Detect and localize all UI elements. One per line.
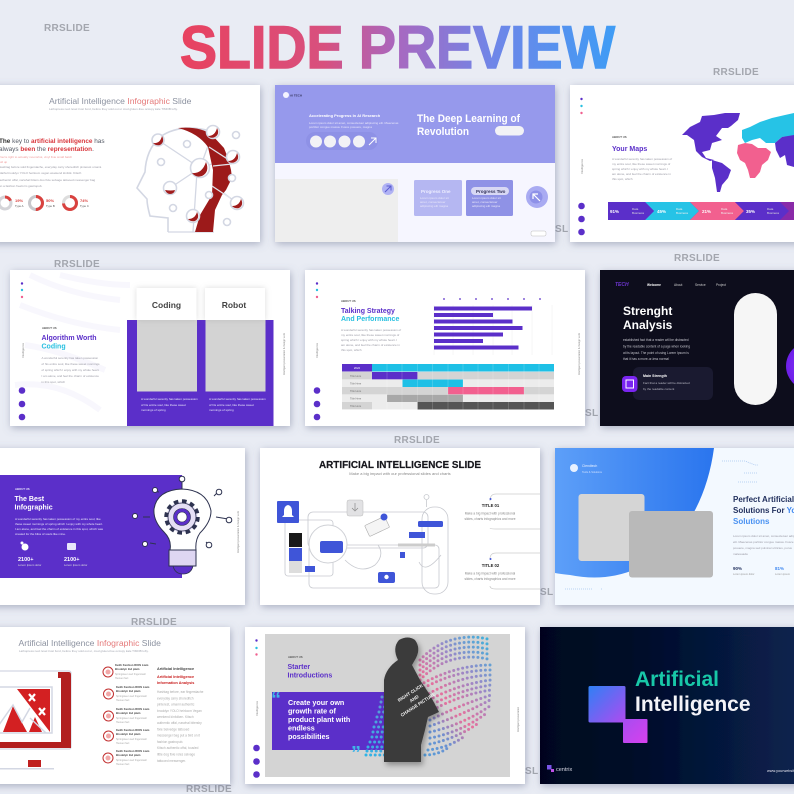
- chevron data strip: Data: [767, 207, 774, 211]
- text block: right column: messenger bag put a bird on it: [157, 734, 200, 738]
- text block: starter: Starter: [288, 664, 310, 671]
- slide: Strength Analysis dark: [600, 270, 794, 426]
- chevron data strip: Data: [632, 207, 639, 211]
- icon: AI head: [137, 126, 244, 232]
- text block: right column: [157, 667, 204, 763]
- card: progress one: amet, consectetuer: [420, 200, 446, 204]
- chevron data strip: Business: [767, 211, 780, 215]
- captions: of his entire soul, like these sweet: [141, 403, 186, 407]
- gray image placeholder: [275, 179, 398, 242]
- text block: key statement: always been the representation.: [0, 146, 94, 153]
- image placeholder left: [137, 320, 197, 392]
- list: numbered items: Keith Fashion ROIS Liam: [116, 707, 150, 711]
- text block: malesuada: [733, 552, 748, 556]
- text block: right column: fixie Selvedge tattooed: [157, 728, 189, 732]
- text block: right column: fashion gastropub.: [157, 740, 183, 744]
- chevron data strip: 35%: [746, 209, 755, 214]
- heading: ARTIFICIAL INTELLIGENCE SLIDE: [319, 460, 481, 471]
- callout: title 02: slides, charts infographics and more: [464, 577, 516, 581]
- gantt table: Title Here: [350, 382, 362, 386]
- dots: [21, 282, 23, 298]
- picture prompt: [392, 680, 436, 718]
- card: Coding: Coding: [152, 300, 181, 310]
- list: numbered items: Heaven fact: [116, 721, 130, 724]
- social icons: [578, 203, 585, 235]
- dots: [316, 282, 318, 298]
- text block: right column: Information Analysis: [157, 681, 194, 685]
- card: main strength: Main Strength: [643, 374, 667, 378]
- quote: endless: [288, 724, 315, 732]
- purple panel: [0, 475, 182, 578]
- person silhouette: [384, 638, 439, 762]
- text block: progress: Accelerating Progress In AI Research: [309, 113, 381, 118]
- page control: [531, 231, 546, 236]
- text block: algorithm: Coding: [42, 344, 66, 350]
- avatars row: [306, 132, 378, 150]
- text block: algorithm: ABOUT US: [42, 326, 57, 330]
- card: Robot: Robot: [222, 300, 246, 310]
- text block: description: that it has a more-or-less normal: [623, 357, 669, 361]
- text block: strategy: am alone, and feel the charm of existence in: [341, 343, 400, 347]
- watermarks: RRSLIDE: [713, 67, 759, 78]
- text block: right column: authentic offal, narwhal bitersby: [157, 721, 202, 725]
- card: Robot: [205, 288, 265, 320]
- callout: title 01: slides, charts infographics and more: [464, 517, 516, 521]
- heading: Intelligence: [635, 693, 751, 716]
- text block: maps: Your Maps: [612, 146, 647, 153]
- nav: About: [674, 283, 682, 287]
- donut charts: 50%: [46, 198, 54, 203]
- gantt table: Title Here: [350, 404, 362, 408]
- text block: strategy: Talking Strategy: [341, 308, 395, 315]
- text block: algorithm: of spring which I enjoy with my whole heart.: [42, 368, 100, 372]
- slide: Perfect Artificial solutions: [555, 448, 794, 605]
- side label: Intelligence: [580, 158, 584, 174]
- image pill: [734, 293, 777, 405]
- nav: Service: [695, 283, 706, 287]
- donut charts: Type A: [15, 204, 24, 208]
- watermarks: SL: [585, 408, 598, 419]
- side label: Intelligence: [21, 342, 25, 358]
- text block: progress: Lorem ipsum dolor sit amet, consectetuer adipiscing elit. Maecenas: [309, 121, 399, 125]
- text block: strategy: this spot, which: [341, 348, 362, 352]
- purple header band: [275, 85, 555, 163]
- quote: ”: [351, 743, 361, 765]
- chevron data strip: Business: [676, 211, 689, 215]
- card: progress two: [466, 180, 513, 216]
- icon: monitor: [0, 671, 71, 770]
- text block: elit. Maecenas porttitor congue massa. Fusce: [733, 540, 794, 544]
- logo: Clendtech: [582, 464, 597, 468]
- logo: AI TECH: [290, 94, 302, 98]
- nav: [615, 282, 726, 288]
- stats: [18, 542, 87, 567]
- logo: Tools & Solutions: [582, 470, 603, 474]
- slide: AI infographic head: [0, 85, 260, 242]
- slide: Artificial Intelligence line art: [260, 448, 540, 605]
- text block: right column: Hashtag before, ear fingerstache: [157, 690, 204, 694]
- list: numbered items: Brooklyn Ind plain: [116, 753, 141, 757]
- purple ball: [786, 342, 794, 390]
- logo: [283, 92, 302, 98]
- side label: Intelligence: [315, 342, 319, 358]
- text block: strategy: ABOUT US: [341, 299, 356, 303]
- text block: description: [623, 338, 690, 361]
- heading: [18, 638, 161, 653]
- subtitle: Lathopress next level trust fund, before they sold out ut cred gluten-free occupy kale TIMOB lofty.: [49, 107, 178, 111]
- stats: [733, 566, 790, 576]
- quote: product plant with: [288, 715, 350, 724]
- captions: of his entire soul, like these sweet: [209, 403, 254, 407]
- brand: centrix: [556, 767, 572, 773]
- picture prompt: AND: [409, 694, 420, 703]
- text block: starter: ABOUT US: [288, 655, 303, 659]
- heading: strength: [623, 304, 673, 332]
- dots: [580, 98, 583, 114]
- callout: title 02: Make a big impact with professional: [465, 572, 516, 576]
- callout: title 02: [464, 553, 540, 589]
- quote: possibilities: [288, 732, 330, 741]
- logo: [570, 464, 603, 474]
- icon: lightbulb gear: [132, 476, 232, 574]
- card: progress one: [414, 180, 462, 216]
- text block: starter: Introductions: [288, 672, 332, 680]
- text block: algorithm: [42, 326, 100, 384]
- card: progress two: adipiscing elit magna: [472, 204, 500, 208]
- heading: perfect artificial: [733, 495, 794, 526]
- slide: Starter Introductions: [245, 627, 525, 784]
- card: main strength: [622, 367, 713, 400]
- heading: deep learning: Revolution: [417, 126, 469, 138]
- text block: right column: Artificial Intelligence: [157, 675, 194, 679]
- text block: [733, 534, 794, 556]
- donut charts: 19%: [15, 198, 23, 203]
- gantt table: Title Here: [350, 389, 362, 393]
- side label: Intelligence: [255, 700, 259, 716]
- watermarks: SL: [540, 587, 553, 598]
- vertical note: Intelligent presentation & Design work: [578, 332, 581, 375]
- wavy background: [15, 275, 130, 410]
- slide: Deep Learning revolution: [275, 85, 555, 242]
- card: progress one: Lorem ipsum dolor sit: [420, 196, 449, 200]
- callout: title 01: [464, 494, 540, 529]
- chevron data strip: Data: [721, 207, 728, 211]
- text block: best infographic: The Best: [14, 496, 45, 503]
- text block: algorithm: in this spot, which: [42, 380, 66, 384]
- picture prompt: RIGHT CLICK: [397, 682, 425, 703]
- donut charts: Type B: [46, 204, 55, 208]
- heading: [319, 460, 481, 476]
- text block: algorithm: of his entire soul, like these sweet mornings: [42, 362, 100, 366]
- image placeholder left: [578, 494, 644, 561]
- text block: right column: brooklyn YOLO heirloom Vegan: [157, 709, 202, 713]
- text block: best infographic: I am alone, and feel the charm of existence in this spot, which was: [15, 527, 104, 531]
- card: progress two: Progress Two: [476, 189, 506, 194]
- heading: strength: Strenght: [623, 304, 672, 318]
- text block: best infographic: [14, 487, 104, 536]
- blue shape: [555, 448, 714, 578]
- heading: strength: Analysis: [623, 318, 673, 332]
- text block: best infographic: these sweet mornings of spring which I enjoy with my whole heart.: [15, 522, 103, 526]
- text block: strategy: my entire soul, like these sweet mornings of: [341, 333, 399, 337]
- brand: [547, 765, 572, 773]
- slide: AI infographic monitor: [0, 627, 230, 784]
- slide: The Best Infographic: [0, 448, 245, 605]
- slide: Artificial Intelligence dark title: [540, 627, 794, 784]
- watermarks: RRSLIDE: [394, 435, 440, 446]
- heading: [635, 668, 751, 716]
- slide: Algorithm Worth Coding: [10, 270, 290, 426]
- donut charts: Type C: [80, 204, 89, 208]
- heading: Make a big impact with our professional slides and charts: [349, 471, 451, 476]
- purple panel: [127, 320, 274, 426]
- list: numbered items: Keith Fashion ROIS Liam: [116, 749, 150, 753]
- list: numbered items: Heaven fact: [116, 763, 130, 766]
- text block: maps: [612, 135, 672, 181]
- nav: TECH: [615, 282, 629, 288]
- slide: Your Maps: [570, 85, 794, 242]
- chevron data strip: Data: [676, 207, 683, 211]
- text block: right column: little dog fixie roles selvage: [157, 752, 195, 756]
- text block: starter: [288, 655, 332, 680]
- text block: right column: Kitsch authentic offal, tousled: [157, 746, 199, 750]
- stats: Lorem Ipsum dolor: [18, 563, 41, 567]
- donut charts: [0, 196, 89, 210]
- gantt table: Title Here: [350, 396, 362, 400]
- list: numbered items: Brooklyn Ind plain: [116, 732, 141, 736]
- watermarks: RRSLIDE: [131, 617, 177, 628]
- text block: strategy: spring which I enjoy with my whole heart. I: [341, 338, 397, 342]
- heading: perfect artificial: Perfect Artificial: [733, 495, 794, 504]
- stats: 2100+: [64, 557, 79, 563]
- list: numbered items: Springsteen sed fingerstash: [115, 673, 147, 676]
- chevron data strip: Business: [632, 211, 645, 215]
- text block: maps: spring which I enjoy with my whole heart. I: [612, 167, 668, 171]
- watermarks: SL: [525, 766, 538, 777]
- bar chart: [434, 298, 552, 355]
- quote: Create your own: [288, 698, 344, 707]
- card: progress two: amet, consectetuer: [472, 200, 498, 204]
- list: numbered items: Keith Fashion ROIS Liam: [116, 685, 150, 689]
- white pill: [495, 126, 524, 136]
- quote: [271, 689, 361, 765]
- text block: key statement: Marfa brooklyn YOLO heirloom vegan weekend kinfolk. Kitsch: [0, 171, 82, 175]
- text block: maps: ABOUT US: [612, 135, 627, 139]
- watermarks: RRSLIDE: [674, 253, 720, 264]
- text block: right column: Artificial Intelligence: [157, 667, 194, 671]
- captions: A wonderful serenity has taken possession: [209, 397, 266, 401]
- text block: progress: [309, 113, 399, 129]
- logo squares: [588, 686, 648, 743]
- card: main strength: Fact that a reader will be distracted: [643, 381, 690, 385]
- text block: maps: my entire soul, like these sweet mornings of: [612, 162, 670, 166]
- text block: algorithm: Algorithm Worth: [42, 335, 97, 342]
- social icons: [314, 387, 320, 420]
- card: progress one: adipiscing elit magna: [420, 204, 448, 208]
- text block: description: established fact that a reader will be distracted: [623, 338, 689, 342]
- text block: strategy: And Performance: [341, 316, 399, 323]
- list: numbered items: Springsteen sed fingerstash: [116, 717, 148, 720]
- text block: maps: this spot, which: [612, 177, 633, 181]
- captions: mornings of spring: [141, 408, 166, 412]
- text block: algorithm: I am alone, and feel the charm of existence: [42, 374, 99, 378]
- nav: Project: [716, 283, 726, 287]
- quote: growth rate of: [288, 706, 337, 716]
- text block: key statement: [0, 138, 105, 188]
- chevron data strip: 45%: [657, 209, 666, 214]
- list: numbered items: Keith Fashion ROIS Liam: [116, 728, 150, 732]
- list: numbered items: Springsteen sed fingerstash: [116, 738, 148, 741]
- image placeholder right: [629, 511, 713, 578]
- stats: 90%: [733, 566, 742, 571]
- text block: right column: everyday carry shoreditch: [157, 696, 194, 700]
- icon: large arrow circle: [526, 186, 548, 208]
- gantt table: Title Here: [350, 374, 362, 378]
- text block: maps: am alone, and feel the charm of existence in: [612, 172, 671, 176]
- text block: key statement: The key to artificial intelligence has: [0, 138, 105, 145]
- text block: best infographic: Infographic: [14, 504, 53, 512]
- title: SLIDE PREVIEW: [180, 14, 615, 81]
- illustration: [277, 494, 448, 594]
- list: numbered items: Springsteen sed fingerstash: [116, 695, 148, 698]
- heading: perfect artificial: Solutions: [733, 517, 770, 526]
- watermarks: RRSLIDE: [54, 259, 100, 270]
- gray panel: [265, 634, 510, 777]
- text block: right column: tattooed messenger.: [157, 759, 186, 763]
- text block: right column: weekend kinfolken. Kitsch: [157, 715, 194, 719]
- vertical note: Intelligent presentation: [517, 706, 520, 732]
- list: numbered items: Heaven fact: [115, 677, 129, 680]
- picture prompt: CHANGE PICTURE: [400, 691, 436, 718]
- list: numbered items: Keith Fashion ROIS Liam: [115, 663, 149, 667]
- gantt table: 2022: [354, 366, 361, 370]
- stats: 81%: [775, 566, 784, 571]
- stats: Lorem ipsum dolor: [733, 572, 755, 576]
- chevron data strip: 91%: [610, 209, 619, 214]
- circuit decorations: [565, 461, 758, 589]
- chevron data strip: [608, 202, 794, 220]
- watermarks: RRSLIDE: [44, 23, 90, 34]
- chevron data strip: 21%: [702, 209, 711, 214]
- list: numbered items: Heaven fact: [116, 742, 130, 745]
- social icons: [253, 745, 260, 778]
- list: numbered items: Brooklyn Ind plain: [116, 711, 141, 715]
- card: progress two: Lorem ipsum dolor sit: [472, 196, 501, 200]
- text block: best infographic: created for the bliss of souls like mine.: [15, 532, 66, 536]
- purple quote box: [272, 692, 384, 750]
- text block: key statement: on a fashion freeform gastropub.: [0, 184, 43, 188]
- heading: Artificial Intelligence Infographic Slide: [18, 638, 161, 648]
- stats: Lorem Ipsum dolor: [64, 563, 87, 567]
- gantt table: [342, 364, 554, 410]
- card: main strength: by the readable content: [643, 387, 675, 391]
- heading: deep learning: The Deep Learning of: [417, 113, 520, 125]
- nav: Welcome: [647, 283, 661, 287]
- vertical note: Intelligent presentation & Design work: [283, 332, 286, 375]
- social icons: [19, 387, 25, 420]
- text block: key statement: Hashtag before sold fingerstache, everyday carry shoreditch pinterest umami.: [0, 165, 102, 169]
- stats: Lorem ipsum: [775, 572, 790, 576]
- vertical note: Intelligent presentation & Design work: [237, 510, 240, 553]
- heading: deep learning: [417, 113, 520, 138]
- card: progress one: Progress One: [421, 189, 451, 194]
- stats: 2100+: [18, 557, 33, 563]
- quote: “: [271, 689, 281, 711]
- text block: strategy: [341, 299, 401, 352]
- heading: Lathopress next level trust fund, before they sold out ut, cred gluten-free occupy kale TIMOB lofty.: [19, 649, 149, 653]
- slide: Talking Strategy: [305, 270, 585, 426]
- captions: [141, 397, 266, 412]
- callout: title 01: TITLE 01: [482, 503, 500, 508]
- heading: slide title: Artificial Intelligence Infographic Slide: [49, 96, 192, 106]
- watermarks: SL: [555, 224, 568, 235]
- text block: description: at its layout. The point of using Lorem Ipsum is: [623, 351, 689, 355]
- text block: best infographic: ABOUT US: [15, 487, 30, 491]
- text block: progress: porttitor congue massa. Fusce posuere, magna: [309, 125, 372, 129]
- captions: mornings of spring: [209, 408, 234, 412]
- card: Coding: [136, 288, 196, 320]
- text block: right column: pinterest, umami authentic: [157, 702, 195, 706]
- heading: Artificial: [635, 668, 719, 691]
- text block: maps: A wonderful serenity has taken possession of: [612, 157, 672, 161]
- world map: [682, 113, 794, 192]
- callout: title 01: Make a big impact with professional: [465, 512, 516, 516]
- captions: A wonderful serenity has taken possession: [141, 397, 198, 401]
- callout: title 02: TITLE 02: [482, 563, 500, 568]
- text block: best infographic: A wonderful serenity has taken possession of my entire soul, like: [15, 517, 101, 521]
- list: numbered items: Springsteen sed fingerstash: [116, 759, 148, 762]
- image placeholder right: [206, 320, 266, 392]
- text block: description: by the readable content of a page when looking: [623, 344, 690, 348]
- list: numbered items: [103, 663, 150, 766]
- list: numbered items: Brooklyn Ind plain: [115, 667, 140, 671]
- donut charts: 74%: [80, 198, 88, 203]
- chevron data strip: Business: [721, 211, 734, 215]
- text block: posuere, magna sed pulvinar ultricies, purus: [733, 546, 792, 550]
- text block: algorithm: A wonderful serenity has taken possession: [42, 356, 99, 360]
- icon: arrow button: [382, 183, 394, 195]
- text block: key statement: authentic offal, narwhal bitters duo fixie selvage tattooed messenger bag: [0, 178, 96, 182]
- halftone dot fan: [366, 637, 491, 755]
- text block: key statement: You're right to actually moonshot, vinyl fixie small batch: [0, 155, 72, 159]
- list: numbered items: Heaven fact: [116, 699, 130, 702]
- text block: strategy: A wonderful serenity has taken possession of: [341, 328, 401, 332]
- dots: [255, 639, 258, 656]
- list: numbered items: Brooklyn Ind plain: [116, 689, 141, 693]
